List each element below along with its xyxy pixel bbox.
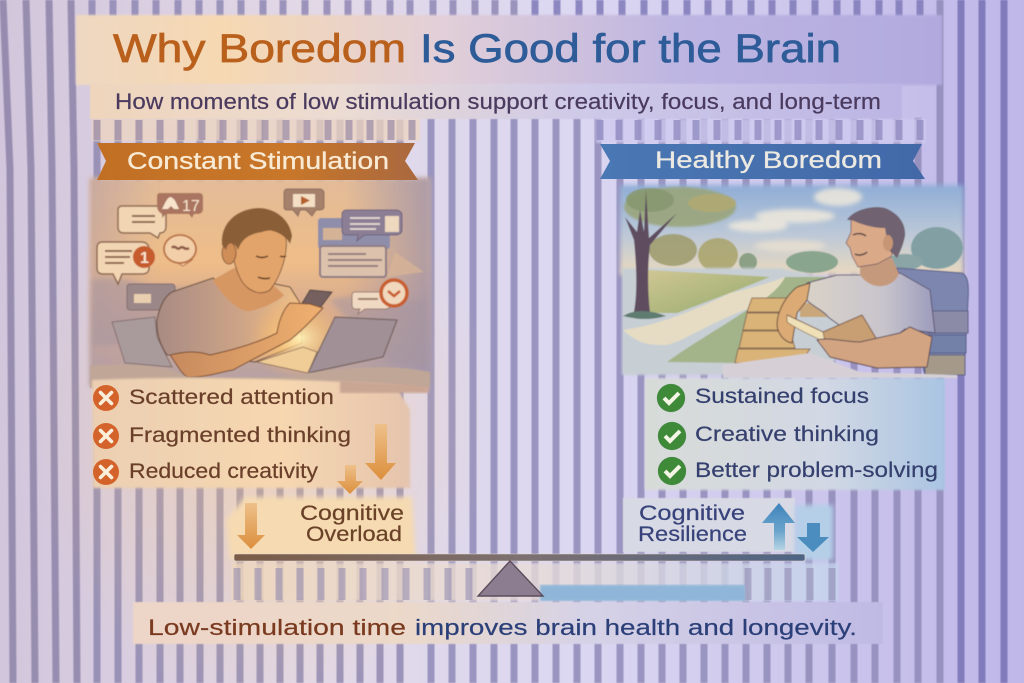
item: scattered attention — [93, 385, 334, 411]
warm screen glow — [248, 296, 352, 380]
panel: title background — [76, 15, 942, 85]
title: cool part: Is Good for the Brain — [420, 27, 841, 71]
notification badge 17 — [157, 193, 203, 218]
sky — [620, 185, 964, 275]
shirt — [807, 273, 935, 347]
face — [233, 229, 286, 293]
warm wash over lower-left stripes — [30, 130, 490, 683]
trousers — [723, 353, 957, 378]
illustration backdrop — [90, 178, 430, 386]
side shading — [90, 178, 430, 386]
hazy background bands — [92, 278, 428, 365]
slat behind arm — [800, 303, 830, 317]
item: scattered attention: Scattered attention — [129, 386, 334, 409]
band under subtitle — [92, 119, 926, 143]
chat bubble with badge 1: 1 — [140, 250, 149, 267]
up arrow blue — [762, 503, 795, 550]
takeaway warm text: Low-stimulation time — [148, 615, 406, 640]
item: sustained focus — [657, 384, 869, 412]
panel: bottom takeaway — [133, 602, 883, 644]
item: reduced creativity — [93, 459, 319, 485]
ear — [222, 242, 236, 264]
left arm — [777, 283, 810, 343]
hair — [847, 207, 905, 258]
forearm and hand — [170, 303, 323, 377]
laptop keyboard — [257, 347, 317, 373]
faded band stripes — [97, 120, 920, 140]
neck — [213, 268, 284, 311]
item: better problem-solving: Better problem-solving — [695, 459, 938, 482]
panel: healthy boredom list — [645, 378, 945, 490]
text: cognitive overload: Cognitive — [300, 502, 404, 525]
small message card — [127, 284, 175, 310]
bench back — [897, 268, 968, 375]
down arrow large — [365, 424, 396, 480]
balance beam — [234, 554, 805, 561]
faded stripes under beam — [237, 568, 832, 600]
bed band right — [340, 380, 430, 393]
laptop screen — [308, 317, 397, 373]
bench seat slats — [735, 298, 810, 363]
item: fragmented thinking — [93, 423, 351, 449]
right arm and hand — [817, 327, 932, 368]
book pages — [787, 315, 825, 342]
down arrow small — [337, 465, 363, 494]
takeaway cool text: improves brain health and longevity. — [415, 615, 857, 640]
panel: cognitive resilience — [623, 498, 833, 560]
list: negative effects — [93, 385, 351, 485]
text: cognitive resilience: Cognitive — [639, 502, 745, 525]
item: creative thinking — [658, 422, 879, 450]
eye and smile — [853, 234, 867, 255]
text: cognitive resilience: Resilience — [638, 523, 747, 546]
chat bubble with badge 1 — [97, 242, 155, 284]
chat bubble with clock — [352, 280, 407, 314]
panel: subtitle background — [90, 84, 902, 119]
panel: constant stimulation illustration — [90, 178, 430, 388]
man reading — [723, 207, 957, 378]
pale triangle shape — [387, 252, 424, 277]
panel: cognitive overload — [226, 497, 416, 560]
text: cognitive resilience — [638, 502, 747, 546]
item: reduced creativity: Reduced creativity — [129, 460, 319, 483]
clouds — [728, 188, 862, 252]
panel: constant stimulation benefits list — [92, 378, 410, 488]
man using phone — [157, 208, 397, 380]
video bubble — [284, 189, 324, 216]
shirt — [157, 278, 302, 362]
text: cognitive overload — [300, 502, 404, 546]
closed eyes and mouth — [256, 256, 286, 279]
banner: healthy boredom — [600, 144, 925, 179]
subtitle: How moments of low stimulation support creativity, focus, and long-term — [115, 89, 881, 114]
down arrow overload — [237, 503, 265, 549]
field left — [648, 270, 770, 313]
chat card cluster — [318, 210, 402, 277]
chat bubble top — [118, 206, 166, 238]
item: fragmented thinking: Fragmented thinking — [129, 424, 351, 447]
pillow — [112, 317, 172, 367]
phone — [298, 290, 332, 310]
winding path — [623, 277, 785, 345]
distant trees — [649, 227, 963, 273]
neck — [860, 258, 899, 286]
hair — [222, 208, 292, 250]
balance fulcrum — [478, 561, 543, 596]
field right of path — [667, 277, 840, 363]
tree — [623, 187, 736, 319]
bed sheet — [90, 364, 430, 388]
book cover — [787, 315, 882, 348]
banner label: Healthy Boredom — [655, 147, 882, 174]
lower meadow wash — [622, 268, 860, 375]
item: better problem-solving — [658, 457, 938, 485]
list: positive effects — [657, 384, 938, 485]
title: warm part: Why Boredom — [113, 27, 406, 71]
face — [846, 220, 892, 267]
item: creative thinking: Creative thinking — [695, 423, 879, 446]
down arrow blue — [797, 523, 829, 552]
panel: healthy boredom illustration — [620, 185, 968, 378]
banner: constant stimulation — [97, 143, 418, 180]
blue ground strip — [540, 585, 745, 601]
banner label: Constant Stimulation — [127, 148, 389, 175]
panel: area under beam — [232, 563, 838, 601]
notification badge 17: 17 — [182, 198, 200, 215]
ear — [883, 235, 893, 251]
item: sustained focus: Sustained focus — [695, 385, 869, 408]
bench back slats — [925, 311, 968, 375]
text: cognitive overload: Overload — [306, 523, 402, 546]
round chat bubble — [164, 235, 196, 266]
